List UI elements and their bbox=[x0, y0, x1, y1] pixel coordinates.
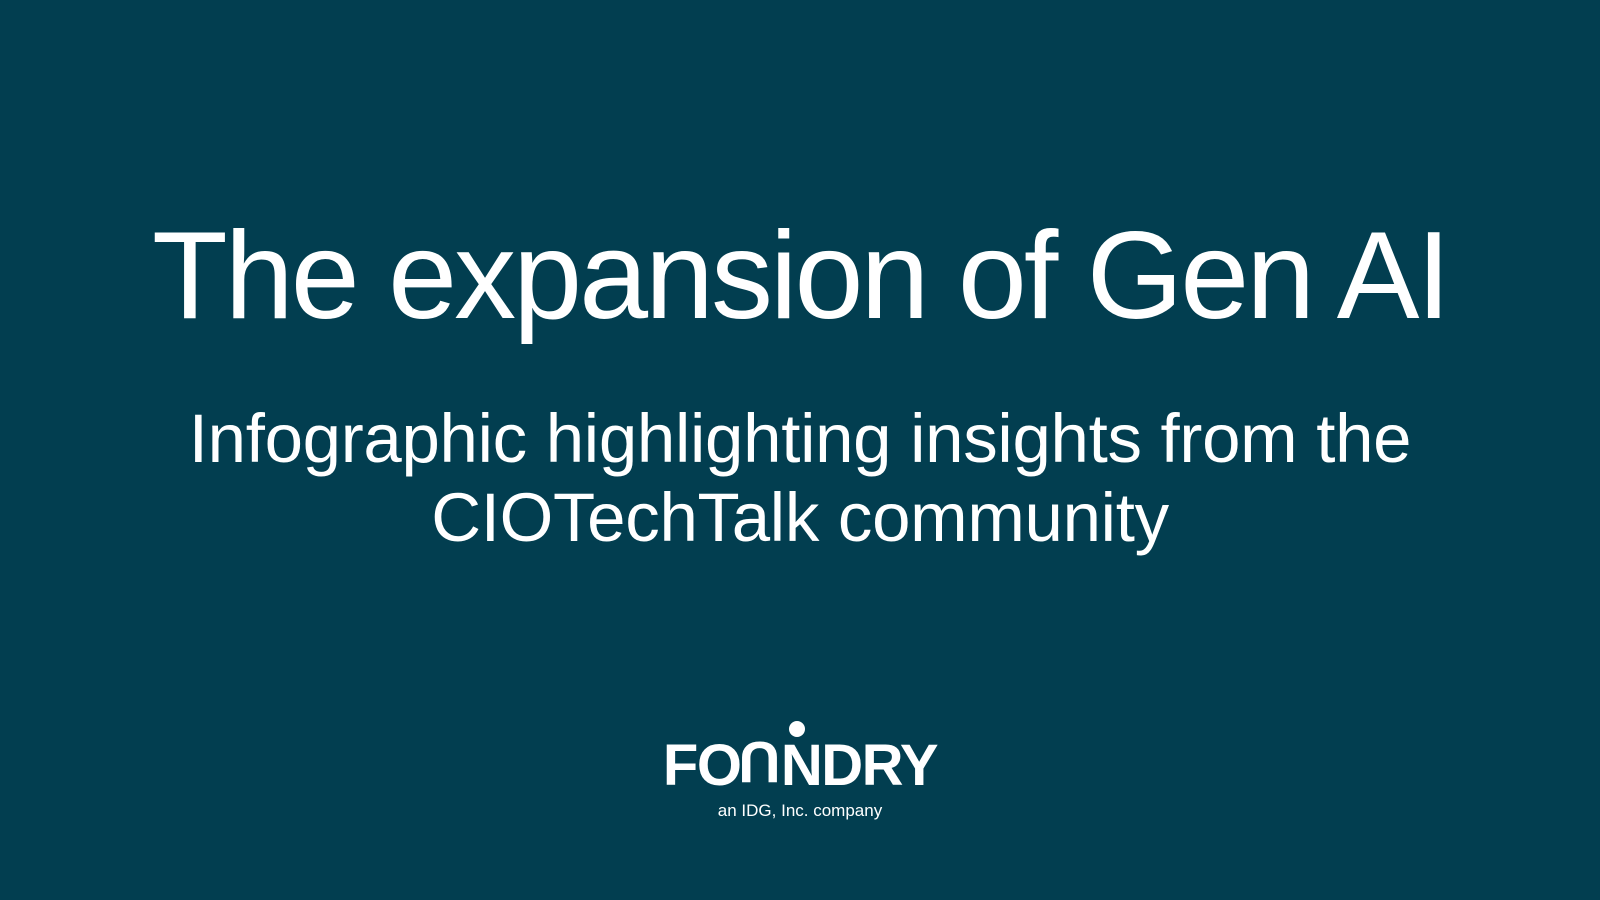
logo wordmark: U bbox=[740, 729, 781, 794]
title: The expansion of Gen AI bbox=[152, 207, 1448, 345]
logo: Foundry bbox=[663, 721, 938, 820]
tagline: an IDG, Inc. company bbox=[718, 801, 882, 820]
logo wordmark: FO NDRY bbox=[663, 733, 937, 798]
subtitle bbox=[189, 400, 1411, 556]
logo dot bbox=[789, 721, 805, 737]
subtitle: Infographic highlighting insights from the bbox=[189, 400, 1411, 477]
subtitle: CIOTechTalk community bbox=[431, 479, 1169, 556]
